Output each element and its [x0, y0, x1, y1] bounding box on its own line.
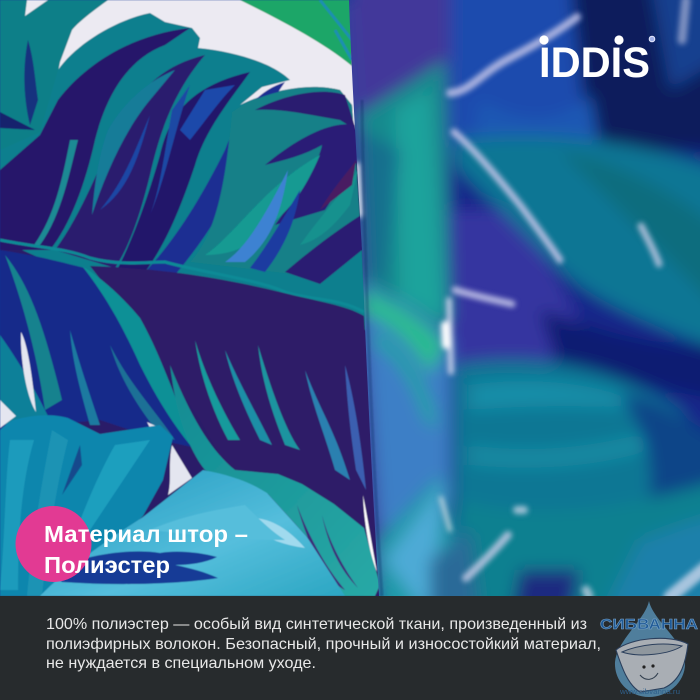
teal leaf, top left: [0, 0, 108, 160]
text block: description: полиэфирных волокон. Безопасный, прочный и износостойкий материал,: [46, 636, 601, 653]
title: [44, 521, 248, 578]
large leaf silhouette, upper: [0, 13, 366, 330]
white fabric area: [0, 0, 360, 130]
midrib of the upper leaf: [0, 240, 364, 312]
dark purple masses: [0, 28, 190, 250]
text block: description: 100% полиэстер — особый вид синтетической ткани, произведенный из: [46, 616, 587, 633]
teal diagonal blade: [83, 267, 190, 445]
watermark url: www.sibvanna.ru: [619, 689, 680, 696]
title: Материал штор –: [44, 521, 248, 547]
light blue leaf, bottom left: [0, 415, 173, 596]
second lobe of the leaf: [190, 87, 362, 275]
watermark: Sibvanna logo: [600, 601, 698, 697]
lower leaf dark field: [90, 266, 365, 340]
icon: water drop: [615, 601, 685, 697]
icon: smiling bathtub: [616, 638, 688, 692]
panel: in-focus curtain fold with tropical leaves: [0, 0, 400, 600]
text block: description: [46, 616, 601, 672]
teal area, lower right: [170, 365, 380, 596]
soft edge shadow of the fold: [362, 100, 382, 596]
logo: IDDIS: IDDIS: [539, 39, 650, 87]
out-of-focus white streaks: [357, 0, 700, 597]
blue blades, lower left: [0, 250, 205, 450]
watermark name: СИБВАННА: [600, 616, 698, 633]
green leaf corner: [240, 0, 352, 66]
title: Полиэстер: [44, 552, 170, 578]
text block: description: не нуждается в специальном уходе.: [46, 655, 316, 672]
panel: description bar: [0, 596, 700, 700]
callout: pink circle behind title: [16, 506, 92, 582]
dark band of the pale leaf: [50, 551, 218, 584]
pale blue leaf, bottom centre: [40, 470, 345, 596]
white gaps between leaves: [21, 332, 36, 412]
